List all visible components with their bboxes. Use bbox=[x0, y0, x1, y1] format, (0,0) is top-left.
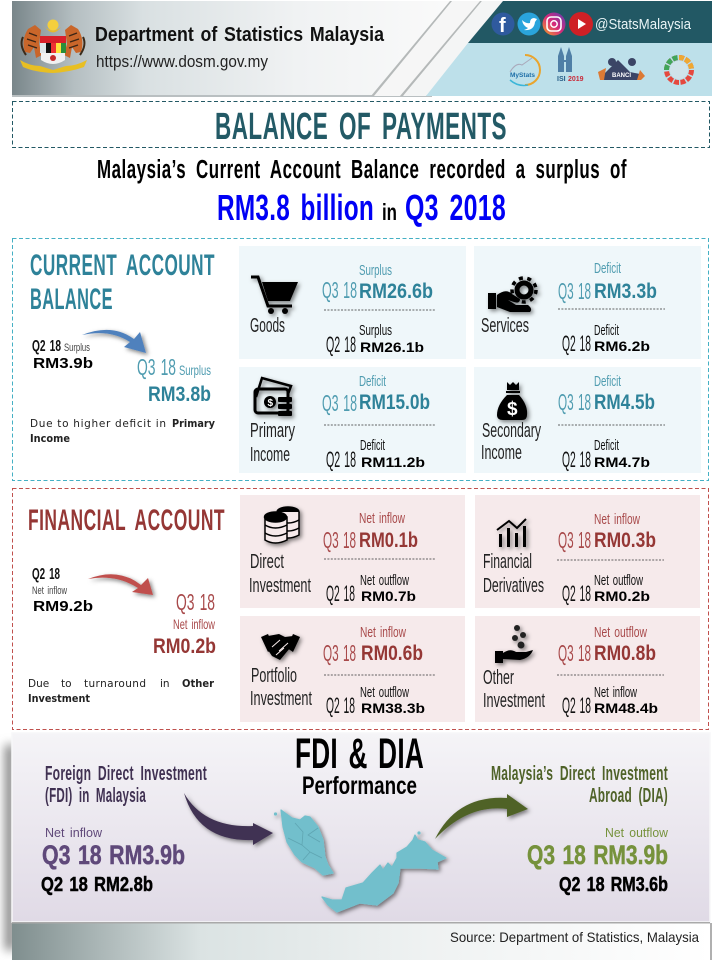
card: financial derivatives bbox=[475, 495, 700, 608]
card: primary income: Primary bbox=[250, 420, 295, 442]
card: other investment: Investment bbox=[483, 690, 545, 712]
card: portfolio investment: Net inflow bbox=[360, 624, 406, 641]
card: other investment: Net inflow bbox=[594, 684, 637, 701]
logo: SDG wheel bbox=[666, 58, 692, 82]
explanation text: Other bbox=[182, 678, 215, 690]
headline figure: RM3.8 billion bbox=[217, 187, 374, 228]
icon: banknotes and coins bbox=[255, 378, 292, 416]
card: primary income bbox=[239, 367, 466, 473]
card: direct investment: Net inflow bbox=[359, 510, 405, 527]
icon: instagram bbox=[542, 12, 566, 36]
card: goods bbox=[239, 246, 466, 359]
card: financial derivatives: Derivatives bbox=[483, 575, 544, 597]
card: goods: RM26.6b bbox=[359, 279, 433, 303]
title: BALANCE OF PAYMENTS bbox=[215, 106, 507, 148]
icon: banknotes and coins: $ bbox=[268, 398, 274, 409]
card: goods: RM26.1b bbox=[360, 339, 424, 355]
arrow: quarter change bbox=[82, 330, 146, 353]
current quarter summary: RM0.2b bbox=[153, 635, 216, 658]
previous quarter summary bbox=[32, 338, 93, 372]
card: secondary income: Secondary bbox=[482, 420, 541, 442]
icon: twitter bbox=[518, 12, 540, 36]
panel: current account balance bbox=[12, 238, 708, 480]
card: other investment: Q3 18 bbox=[558, 640, 591, 666]
card: financial derivatives: Financial bbox=[483, 551, 532, 573]
logo: Banci bbox=[598, 58, 645, 80]
arrow: DIA out of Malaysia bbox=[435, 794, 528, 839]
headline figure: in bbox=[382, 199, 397, 225]
card: primary income: Deficit bbox=[360, 437, 385, 454]
card: other investment: RM48.4b bbox=[594, 700, 658, 716]
DIA block: Net outflow bbox=[605, 825, 669, 840]
explanation text: to bbox=[61, 678, 72, 690]
card: secondary income: Income bbox=[481, 442, 522, 464]
previous quarter summary: RM9.2b bbox=[33, 598, 93, 615]
logo: MyStats bbox=[510, 55, 540, 85]
DIA block bbox=[491, 763, 669, 896]
explanation text: turnaround bbox=[84, 678, 146, 690]
FDI block: (FDI) in Malaysia bbox=[45, 785, 146, 807]
card: portfolio investment: Q3 18 bbox=[323, 640, 356, 666]
explanation text: Investment bbox=[28, 693, 90, 705]
explanation text: Due to higher deficit in bbox=[30, 418, 166, 430]
logo: Banci: BANCI bbox=[612, 73, 631, 79]
icon: bar chart with trend line bbox=[497, 519, 526, 547]
card: services: RM6.2b bbox=[594, 338, 650, 354]
explanation text: Primary bbox=[172, 418, 215, 430]
icon: coin stacks bbox=[264, 507, 299, 543]
current quarter summary: Surplus bbox=[179, 362, 211, 378]
card: goods: Q3 18 bbox=[322, 277, 357, 303]
panel: financial account bbox=[12, 488, 708, 730]
explanation text: Due bbox=[28, 678, 49, 690]
card: primary income: Q2 18 bbox=[326, 447, 356, 472]
card: portfolio investment: Q2 18 bbox=[326, 693, 355, 718]
card: goods: Surplus bbox=[359, 322, 392, 339]
card: primary income: Income bbox=[250, 444, 290, 466]
card: services: Q3 18 bbox=[558, 278, 591, 304]
headline figure: Q3 2018 bbox=[405, 187, 506, 228]
previous quarter summary: Net inflow bbox=[32, 585, 67, 597]
previous quarter summary: Q2 18 bbox=[32, 338, 61, 355]
DIA block: Q3 18 RM3.9b bbox=[527, 840, 668, 870]
DIA block: Abroad (DIA) bbox=[589, 785, 668, 807]
icon: national crest bbox=[20, 20, 87, 73]
footer source bar bbox=[12, 922, 712, 960]
card: financial derivatives: Net outflow bbox=[594, 572, 643, 589]
card: services bbox=[474, 246, 701, 359]
current quarter summary bbox=[137, 354, 211, 406]
card: financial derivatives: Q3 18 bbox=[558, 527, 591, 553]
card: secondary income bbox=[474, 367, 701, 473]
card: primary income: Q3 18 bbox=[322, 390, 357, 416]
previous quarter summary: Q2 18 bbox=[32, 566, 60, 583]
previous quarter summary: RM3.9b bbox=[33, 355, 93, 372]
explanation text: Income bbox=[30, 433, 70, 445]
card: other investment: Net outflow bbox=[594, 624, 647, 641]
card: portfolio investment: Investment bbox=[250, 688, 312, 710]
logo: ISI 2019: 2019 bbox=[568, 76, 584, 83]
heading: current account balance bbox=[30, 249, 215, 316]
card: financial derivatives: Q2 18 bbox=[562, 581, 591, 606]
card: primary income: Deficit bbox=[359, 373, 387, 390]
card: portfolio investment: RM0.6b bbox=[361, 641, 423, 665]
map of Malaysia bbox=[274, 810, 446, 912]
icon: hand with falling coins bbox=[495, 625, 533, 663]
card: services: Deficit bbox=[594, 322, 619, 339]
card: secondary income: Q2 18 bbox=[562, 447, 591, 472]
card: other investment: Q2 18 bbox=[562, 693, 591, 718]
card: direct investment: Q3 18 bbox=[323, 527, 356, 553]
card: financial derivatives: RM0.3b bbox=[594, 528, 656, 552]
heading: financial account: FINANCIAL ACCOUNT bbox=[28, 504, 225, 537]
card: secondary income: Deficit bbox=[594, 373, 622, 390]
logo: ISI 2019: ISI bbox=[557, 76, 566, 83]
card: portfolio investment: Net outflow bbox=[360, 684, 409, 701]
card: portfolio investment: RM38.3b bbox=[361, 700, 425, 716]
heading: FDI and DIA bbox=[295, 730, 424, 800]
current quarter summary: RM3.8b bbox=[148, 383, 211, 406]
explanation text bbox=[28, 678, 215, 705]
current quarter summary: Net inflow bbox=[173, 616, 216, 632]
header organisation name: Department of Statistics Malaysia bbox=[95, 24, 385, 46]
card: direct investment: RM0.1b bbox=[359, 528, 418, 552]
icon: money bag: $ bbox=[507, 399, 518, 420]
card: services: Deficit bbox=[594, 260, 622, 277]
card: services: Q2 18 bbox=[562, 331, 591, 356]
card: portfolio investment bbox=[240, 616, 465, 722]
card: other investment: Other bbox=[483, 667, 514, 689]
explanation text: in bbox=[160, 678, 170, 690]
card: direct investment: Investment bbox=[249, 575, 311, 597]
icon: youtube bbox=[569, 12, 593, 36]
FDI block: Q2 18 RM2.8b bbox=[41, 874, 153, 896]
card: financial derivatives: RM0.2b bbox=[594, 588, 650, 604]
arrow: quarter change bbox=[88, 574, 153, 595]
header website url: https://www.dosm.gov.my bbox=[96, 53, 269, 71]
card: direct investment: Net outflow bbox=[360, 572, 409, 589]
card: goods: Q2 18 bbox=[326, 332, 356, 357]
card: primary income: RM11.2b bbox=[361, 454, 425, 470]
card: other investment: RM0.8b bbox=[594, 641, 656, 665]
arrow: FDI into Malaysia bbox=[184, 793, 273, 845]
heading: current account balance: CURRENT ACCOUNT bbox=[30, 249, 215, 282]
card: goods: Surplus bbox=[359, 262, 392, 279]
card: direct investment: Direct bbox=[250, 551, 284, 573]
heading: FDI and DIA: Performance bbox=[302, 772, 417, 800]
heading: current account balance: BALANCE bbox=[30, 283, 113, 316]
current quarter summary bbox=[153, 589, 216, 658]
icon: facebook bbox=[492, 12, 514, 37]
card: financial derivatives: Net inflow bbox=[594, 511, 640, 528]
card: services: Services bbox=[481, 315, 529, 337]
card: other investment bbox=[475, 616, 700, 722]
card: secondary income: RM4.5b bbox=[594, 390, 655, 414]
card: direct investment: Q2 18 bbox=[326, 581, 355, 606]
logo: MyStats: MyStats bbox=[510, 72, 535, 79]
DIA block: Q2 18 RM3.6b bbox=[559, 874, 668, 896]
explanation text bbox=[30, 418, 215, 445]
FDI block: Net inflow bbox=[45, 825, 103, 840]
current quarter summary: Q3 18 bbox=[137, 354, 176, 380]
card: secondary income: Q3 18 bbox=[558, 389, 591, 415]
source text: Source: Department of Statistics, Malaysia bbox=[450, 929, 699, 945]
icon: hand with gear bbox=[488, 278, 536, 312]
FDI block: Q3 18 RM3.9b bbox=[42, 840, 185, 870]
icon: handshake bbox=[261, 634, 300, 660]
title box bbox=[12, 102, 710, 148]
icon: facebook: f bbox=[499, 15, 506, 37]
current quarter summary: Q3 18 bbox=[176, 589, 215, 615]
card: services: RM3.3b bbox=[594, 279, 657, 303]
FDI block: Foreign Direct Investment bbox=[45, 763, 207, 785]
logo: ISI 2019 bbox=[557, 47, 584, 83]
social handle: @StatsMalaysia bbox=[595, 16, 692, 33]
card: goods: Goods bbox=[250, 315, 285, 337]
card: primary income: RM15.0b bbox=[359, 390, 430, 414]
heading: FDI and DIA: FDI & DIA bbox=[295, 730, 424, 778]
icon: money bag bbox=[497, 382, 527, 420]
previous quarter summary: Surplus bbox=[64, 342, 90, 354]
card: portfolio investment: Portfolio bbox=[251, 665, 297, 687]
card: direct investment: RM0.7b bbox=[361, 588, 416, 604]
card: secondary income: RM4.7b bbox=[594, 454, 650, 470]
icon: shopping cart bbox=[251, 277, 298, 314]
card: secondary income: Deficit bbox=[594, 437, 619, 454]
FDI block bbox=[41, 763, 207, 896]
previous quarter summary bbox=[32, 566, 93, 615]
header banner bbox=[12, 1, 712, 97]
card: direct investment bbox=[240, 495, 465, 608]
panel: FDI and DIA bbox=[5, 730, 710, 950]
